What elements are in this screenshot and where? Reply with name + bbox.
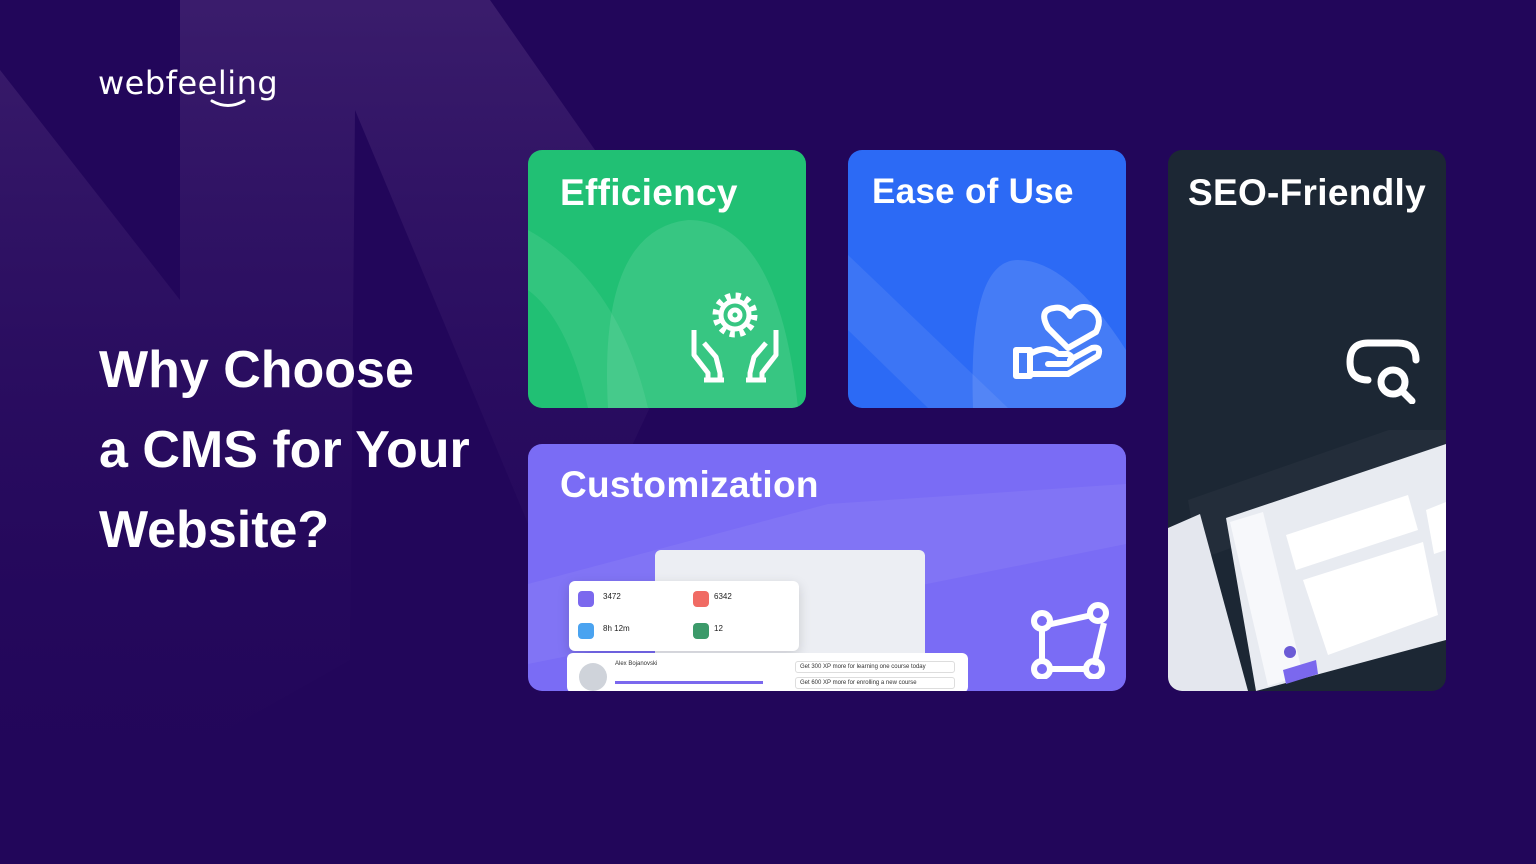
panel: customization: Get 300 XP more for learning one course today	[800, 664, 926, 670]
title: Website?	[99, 501, 329, 559]
icon: search	[1346, 340, 1420, 404]
title	[99, 341, 470, 559]
heading: Efficiency	[560, 172, 738, 213]
heading: Ease of Use	[872, 172, 1074, 211]
icon: hands with gear	[692, 292, 778, 382]
panel: customization: 3472	[603, 592, 621, 601]
panel: customization	[528, 444, 1126, 691]
title: Why Choose	[99, 341, 414, 399]
panel: efficiency	[528, 150, 806, 408]
panel: customization: 6342	[714, 592, 732, 601]
panel: customization: Get 600 XP more for enrolling a new course	[800, 680, 917, 686]
panel: customization: 8h 12m	[603, 624, 630, 633]
heading: SEO-Friendly	[1188, 172, 1426, 213]
panel: customization: 12	[714, 624, 723, 633]
logo: webfeeling	[98, 64, 278, 102]
heading: Customization	[560, 464, 819, 505]
icon: vector shape	[1031, 602, 1109, 679]
dashboard mockup	[655, 550, 925, 691]
dashboard mockup	[1168, 444, 1446, 691]
panel: ease of use	[848, 150, 1126, 408]
icon: hand with heart	[1013, 304, 1102, 379]
panel: customization: Alex Bojanovski	[615, 661, 657, 667]
title: a CMS for Your	[99, 421, 470, 479]
panel: seo-friendly	[1168, 150, 1446, 691]
